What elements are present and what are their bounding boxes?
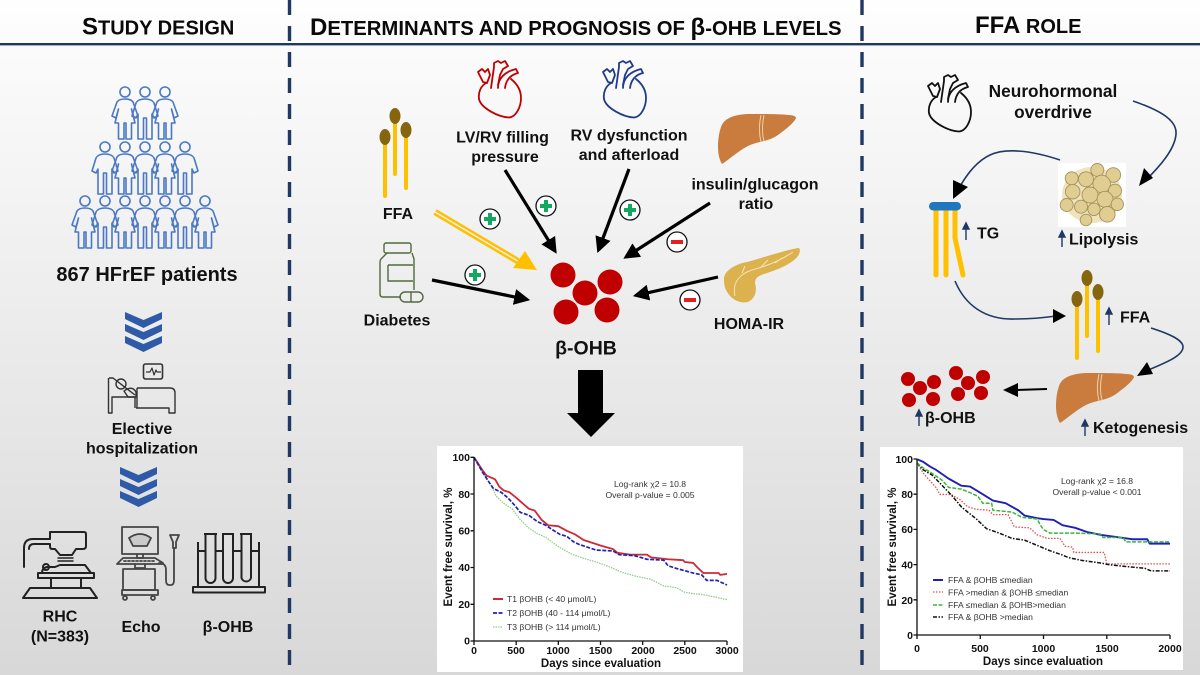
arrow: liver to beta-OHB <box>1003 383 1047 397</box>
label: echo: Echo <box>121 619 161 636</box>
x ticks: 1000 <box>1032 643 1055 655</box>
label: HOMA-IR: HOMA-IR <box>714 316 785 333</box>
chart: survival by FFA and beta-OHB <box>880 447 1183 670</box>
arrow: filling pressure <box>505 170 555 251</box>
icon: FFA molecules <box>1072 270 1104 358</box>
y ticks: 0 <box>464 636 470 648</box>
stats note: Log-rank χ2 = 16.8 <box>1061 476 1133 486</box>
y ticks: 60 <box>458 526 470 538</box>
stats note: Overall p-value < 0.001 <box>1052 487 1142 497</box>
legend: FFA & βOHB ≤median <box>948 575 1033 585</box>
legend: FFA ≤median & βOHB>median <box>948 600 1066 610</box>
x ticks <box>914 643 1182 655</box>
column divider right <box>860 0 864 675</box>
panel: FFA role <box>901 75 1188 437</box>
arrow: HOMA-IR <box>636 277 718 295</box>
curves <box>917 459 1170 571</box>
sign: filling plus <box>536 196 556 216</box>
label: RHC: RHC <box>43 608 78 626</box>
x ticks: 2500 <box>673 645 697 657</box>
y ticks: 60 <box>901 524 913 536</box>
y ticks: 80 <box>901 489 913 501</box>
x axis title: Days since evaluation <box>983 656 1103 668</box>
stats note: Log-rank χ2 = 10.8 <box>614 479 686 489</box>
icon: adipose tissue <box>1058 163 1126 227</box>
icon: liver <box>718 114 796 164</box>
heading: determinants and prognosis: DETERMINANTS AND PROGNOSIS OF β-OHB LEVELS <box>310 14 842 41</box>
icon: patient group <box>72 87 218 248</box>
panel: study design: hospitalization <box>86 440 198 458</box>
icon: triglyceride <box>929 202 963 275</box>
header rule <box>0 43 1200 45</box>
label: RV dysfunction: and afterload <box>579 147 679 164</box>
x ticks: 500 <box>507 645 525 657</box>
icon: RHC scanner <box>23 532 97 598</box>
axes <box>470 457 727 645</box>
arrow: diabetes <box>432 280 527 300</box>
label: lipolysis: Lipolysis <box>1069 232 1138 248</box>
legend: T2 βOHB (40 - 114 μmol/L) <box>507 608 610 618</box>
x ticks: 3000 <box>715 645 739 657</box>
icon: test tubes <box>193 534 265 592</box>
label: diabetes: Diabetes <box>364 312 430 330</box>
label: LV/RV filling pressure: pressure <box>471 149 539 166</box>
sign: FFA plus <box>480 209 500 229</box>
x ticks: 2000 <box>1158 643 1182 655</box>
label: FFA: FFA <box>1120 310 1151 326</box>
legend: FFA >median & βOHB ≤median <box>948 588 1068 598</box>
sign: HOMA minus <box>680 290 700 310</box>
label: neurohormonal overdrive: Neurohormonal <box>989 81 1117 101</box>
y ticks: 0 <box>907 630 913 642</box>
arrow: to lipolysis <box>1133 101 1176 186</box>
label: insulin glucagon ratio: ratio <box>739 196 774 213</box>
x ticks: 1500 <box>1095 643 1119 655</box>
x ticks: 1000 <box>546 645 570 657</box>
arrow: to liver <box>1137 328 1183 376</box>
icon: FFA <box>380 108 412 196</box>
label: beta-OHB: β-OHB <box>555 338 617 360</box>
icon: pancreas <box>724 248 800 302</box>
beta-OHB molecules <box>901 366 990 407</box>
icon: black heart <box>928 75 971 132</box>
legend: FFA & βOHB >median <box>948 612 1033 622</box>
x ticks: 0 <box>471 645 477 657</box>
arrow: RV dysfunction <box>598 169 629 250</box>
legend: T3 βOHB (> 114 μmol/L) <box>507 622 601 632</box>
icon: red heart <box>478 61 521 118</box>
curves <box>474 457 727 600</box>
label: LV/RV filling pressure: LV/RV filling <box>456 130 549 146</box>
label: elective hospitalization: Elective <box>112 421 172 438</box>
arrow: to FFA <box>955 281 1066 323</box>
beta-OHB molecules <box>550 262 622 324</box>
panel: determinants <box>364 61 819 437</box>
stats note: Overall p-value = 0.005 <box>605 490 695 500</box>
y ticks: 100 <box>895 454 913 466</box>
icon: liver <box>1056 373 1134 423</box>
y ticks <box>452 452 470 648</box>
column divider left <box>288 0 291 675</box>
icon: blue heart <box>603 61 646 118</box>
chart panel <box>880 447 1183 670</box>
axes <box>914 459 1170 639</box>
sign: RV plus <box>620 200 640 220</box>
big arrow down <box>567 370 615 437</box>
icon: echo machine <box>117 527 179 600</box>
heading: FFA role: FFA ROLE <box>975 12 1081 39</box>
label: ketogenesis: Ketogenesis <box>1093 420 1188 437</box>
chart panel <box>437 446 743 672</box>
y axis title: Event free survival, % <box>443 488 455 606</box>
arrow: FFA to beta-OHB <box>435 212 537 270</box>
legend: T1 βOHB (< 40 μmol/L) <box>507 594 597 604</box>
y ticks: 80 <box>458 489 470 501</box>
label: FFA <box>1106 308 1151 326</box>
y axis title: Event free survival, % <box>887 488 899 606</box>
panel: study design <box>23 87 265 646</box>
arrow: insulin glucagon <box>626 203 710 257</box>
x ticks: 1500 <box>589 645 612 657</box>
y ticks: 40 <box>901 560 913 572</box>
arrow: to TG <box>953 151 1060 199</box>
x ticks: 500 <box>971 643 989 655</box>
y ticks: 20 <box>901 595 913 607</box>
icon: medicine bottle <box>380 243 423 302</box>
sign: diabetes plus <box>465 265 485 285</box>
panel: study design: (N=383) <box>31 628 89 646</box>
label: TG: TG <box>977 226 999 242</box>
label: beta-OHB: β-OHB <box>925 410 976 427</box>
x ticks: 0 <box>914 643 920 655</box>
x axis title: Days since evaluation <box>541 658 661 670</box>
chart: survival by beta-OHB tertile <box>437 446 743 672</box>
label: TG <box>963 223 999 242</box>
y ticks: 40 <box>458 562 470 574</box>
y ticks <box>895 454 913 642</box>
sign: insulin minus <box>667 232 687 252</box>
label: insulin glucagon ratio: insulin/glucagon <box>691 176 819 194</box>
y ticks: 100 <box>452 452 470 464</box>
legend <box>493 594 610 632</box>
label: neurohormonal overdrive: overdrive <box>1014 102 1092 122</box>
label: beta-OHB test: β-OHB <box>203 619 253 636</box>
heading: study design: STUDY DESIGN <box>82 14 234 40</box>
chevrons: second <box>120 467 157 507</box>
x ticks <box>471 645 739 657</box>
chevrons: first <box>125 312 162 352</box>
label: RV dysfunction: RV dysfunction <box>570 128 688 144</box>
y ticks: 20 <box>458 599 470 611</box>
icon: hospital bed <box>108 364 175 413</box>
legend <box>933 575 1068 622</box>
x ticks: 2000 <box>631 645 655 657</box>
label: FFA: FFA <box>383 206 414 223</box>
patients label: 867 HFrEF patients <box>56 264 238 286</box>
